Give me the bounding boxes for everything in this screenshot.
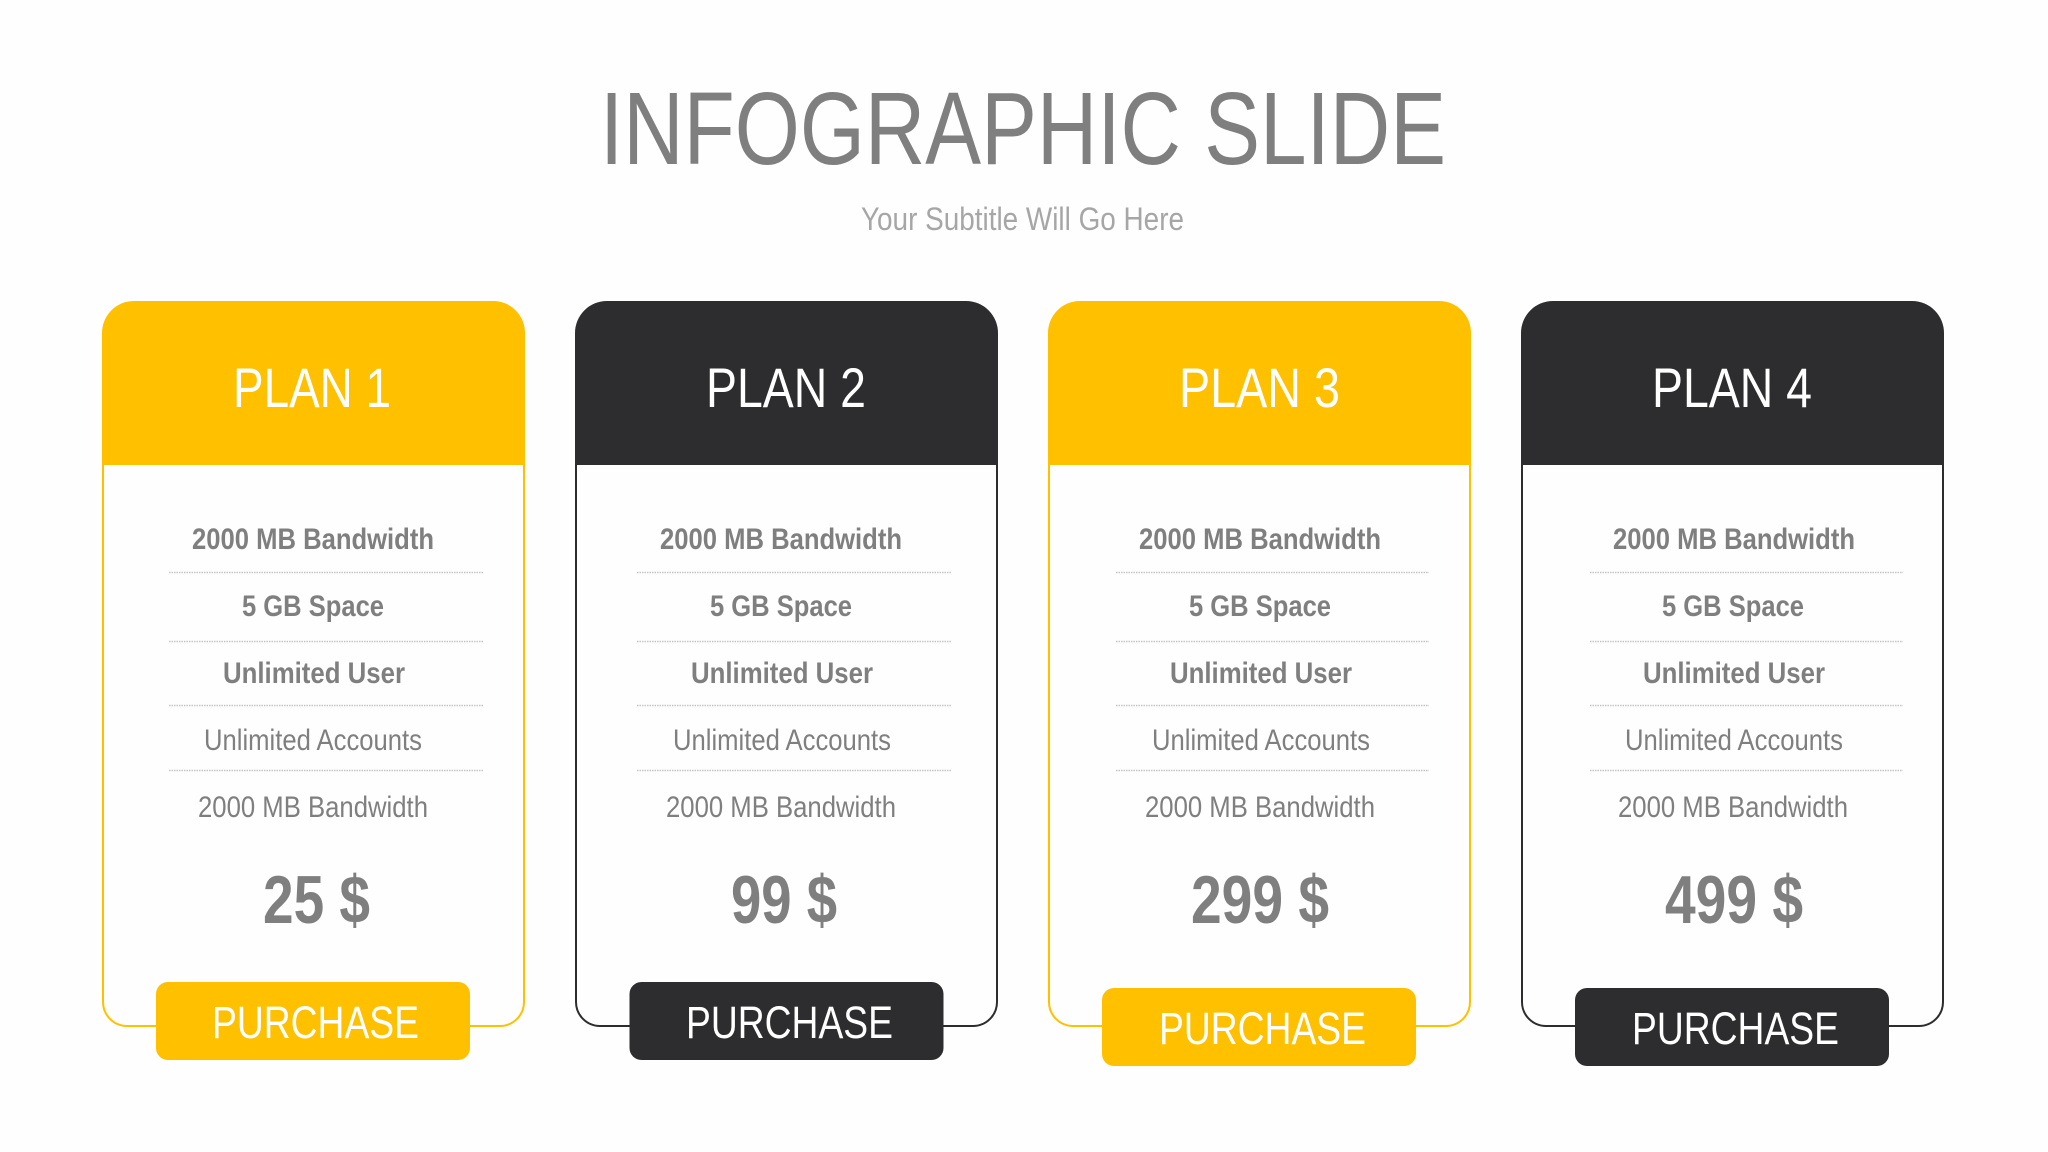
price: 499 $ bbox=[1665, 862, 1803, 938]
plan name: PLAN 2 bbox=[706, 356, 866, 419]
header band bbox=[102, 301, 525, 465]
feature list: 5 GB Space bbox=[242, 590, 384, 623]
feature list: 2000 MB Bandwidth bbox=[1618, 791, 1848, 824]
feature list bbox=[1590, 523, 1903, 824]
card outline bbox=[576, 320, 997, 1026]
feature list: 2000 MB Bandwidth bbox=[1613, 523, 1855, 556]
feature list bbox=[637, 523, 951, 824]
price: 99 $ bbox=[731, 862, 837, 938]
header band bbox=[575, 301, 998, 465]
subtitle: Your Subtitle Will Go Here bbox=[861, 201, 1184, 237]
header band bbox=[1521, 301, 1944, 465]
purchase button: PURCHASE bbox=[686, 997, 893, 1048]
feature list: Unlimited Accounts bbox=[204, 724, 422, 757]
feature list: Unlimited Accounts bbox=[1152, 724, 1370, 757]
feature list: Unlimited User bbox=[1643, 657, 1825, 690]
feature list: Unlimited Accounts bbox=[673, 724, 891, 757]
feature list: Unlimited User bbox=[691, 657, 873, 690]
card outline bbox=[1049, 320, 1470, 1026]
feature list: Unlimited User bbox=[1170, 657, 1352, 690]
header band bbox=[1048, 301, 1471, 465]
feature list: 2000 MB Bandwidth bbox=[198, 791, 428, 824]
purchase button bbox=[1575, 988, 1889, 1066]
feature list: 2000 MB Bandwidth bbox=[192, 523, 434, 556]
panel: plan 4 bbox=[1521, 301, 1944, 1066]
feature list: 2000 MB Bandwidth bbox=[666, 791, 896, 824]
feature list: 5 GB Space bbox=[710, 590, 852, 623]
plan name: PLAN 4 bbox=[1652, 356, 1812, 419]
purchase button: PURCHASE bbox=[1159, 1003, 1366, 1054]
card outline bbox=[103, 320, 524, 1026]
feature list: 2000 MB Bandwidth bbox=[1145, 791, 1375, 824]
panel: plan 2 bbox=[575, 301, 998, 1060]
feature list: Unlimited Accounts bbox=[1625, 724, 1843, 757]
feature list: 2000 MB Bandwidth bbox=[660, 523, 902, 556]
plan name: PLAN 3 bbox=[1179, 356, 1340, 419]
plan name: PLAN 1 bbox=[233, 356, 391, 419]
title: INFOGRAPHIC SLIDE bbox=[600, 71, 1446, 186]
price: 25 $ bbox=[263, 862, 370, 938]
feature list bbox=[169, 523, 483, 824]
purchase button: PURCHASE bbox=[1632, 1003, 1839, 1054]
purchase button bbox=[1102, 988, 1416, 1066]
feature list: 5 GB Space bbox=[1662, 590, 1804, 623]
purchase button: PURCHASE bbox=[212, 997, 419, 1048]
purchase button bbox=[630, 982, 944, 1060]
card outline bbox=[1522, 320, 1943, 1026]
feature list bbox=[1116, 523, 1429, 824]
panel: plan 3 bbox=[1048, 301, 1471, 1066]
feature list: 5 GB Space bbox=[1189, 590, 1331, 623]
price: 299 $ bbox=[1191, 862, 1329, 938]
purchase button bbox=[156, 982, 470, 1060]
feature list: 2000 MB Bandwidth bbox=[1139, 523, 1381, 556]
panel: plan 1 bbox=[102, 301, 525, 1060]
feature list: Unlimited User bbox=[223, 657, 405, 690]
